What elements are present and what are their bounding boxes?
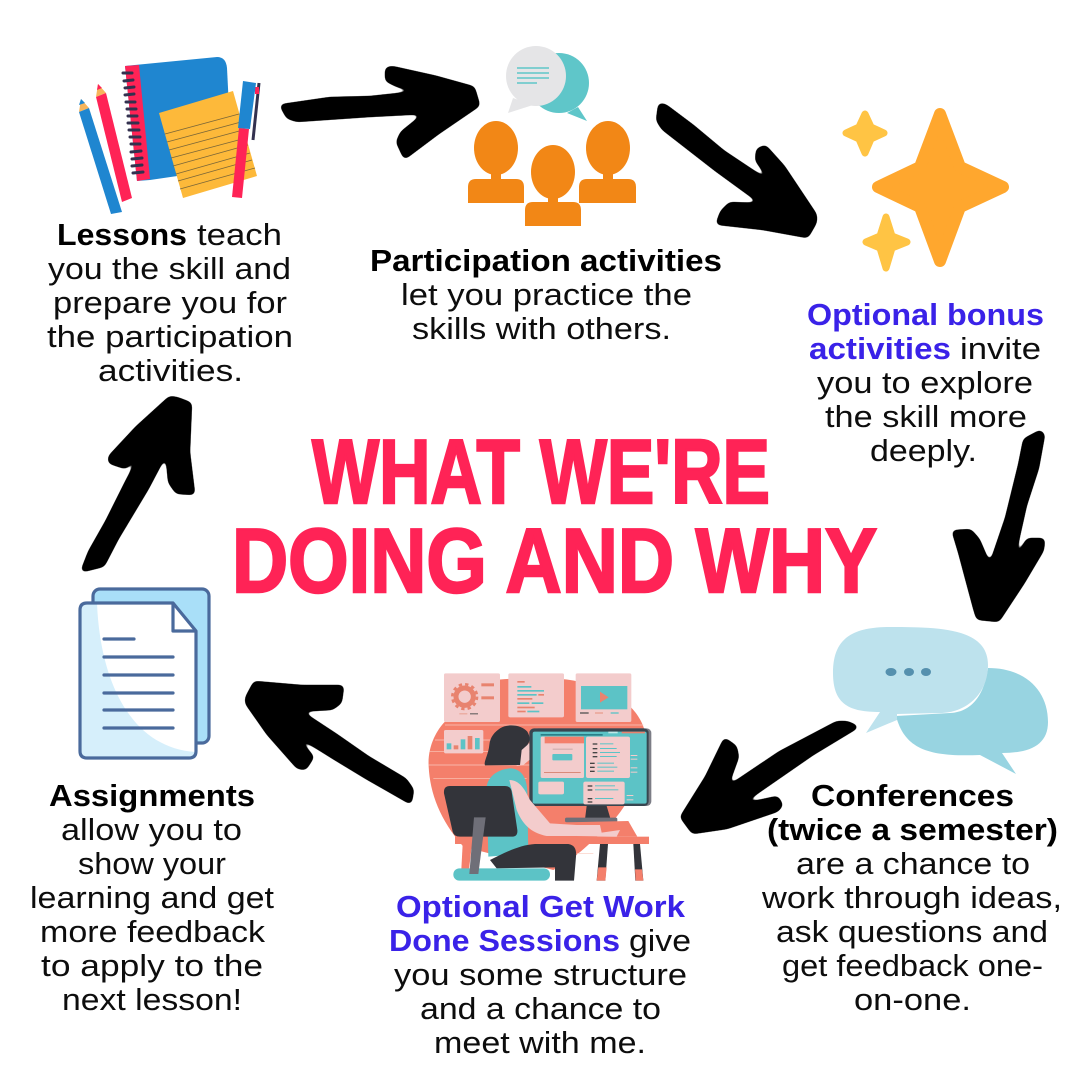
text: optional get work done sessions: and a chance to <box>420 991 661 1026</box>
arrow: assignments to lessons <box>83 398 193 570</box>
text: lessons: teach <box>197 217 282 252</box>
text: optional bonus activities: the skill more <box>825 399 1027 434</box>
text: optional bonus activities <box>807 297 1044 468</box>
title <box>232 422 877 612</box>
text: assignments: allow you to <box>61 812 242 847</box>
text: assignments: show your <box>78 846 226 881</box>
text: optional bonus activities: deeply. <box>870 433 977 468</box>
text: optional bonus activities: you to explore <box>817 365 1033 400</box>
icon: group of people with speech bubbles <box>468 46 636 226</box>
icon: conference speech bubbles <box>833 627 1048 774</box>
text: optional get work done sessions <box>389 889 691 1060</box>
text: lessons: Lessons <box>57 217 187 252</box>
title: DOING AND WHY <box>232 511 877 612</box>
text: optional bonus activities: Optional bonus <box>807 297 1044 332</box>
icon: sparkle stars <box>846 114 1003 268</box>
text: lessons <box>47 217 293 388</box>
text: optional get work done sessions: give <box>629 923 691 958</box>
text: conferences: are a chance to <box>796 846 1030 881</box>
title: WHAT WE'RE <box>312 422 770 523</box>
text: participation activities: Participation activities <box>370 243 722 278</box>
text: assignments: Assignments <box>49 778 255 813</box>
text: optional get work done sessions: you some structure <box>394 957 687 992</box>
arrow: conferences to work sessions <box>682 723 856 832</box>
arrow: bonus to conferences <box>954 432 1043 620</box>
text: optional bonus activities: invite <box>960 331 1041 366</box>
text: assignments: learning and get <box>30 880 274 915</box>
text: participation activities: let you practice the <box>401 277 692 312</box>
icon: documents <box>80 589 209 758</box>
text: conferences: work through ideas, <box>761 880 1062 915</box>
arrow: lessons to participation <box>282 68 478 157</box>
text: conferences: on-one. <box>854 982 971 1017</box>
arrow: participation to bonus <box>658 105 815 236</box>
text: optional get work done sessions: Done Sessions <box>389 923 620 958</box>
text: optional bonus activities: activities <box>809 331 951 366</box>
text: conferences: get feedback one- <box>782 948 1043 983</box>
text: assignments: next lesson! <box>62 982 242 1017</box>
text: assignments <box>30 778 274 1017</box>
text: conferences: (twice a semester) <box>767 812 1058 847</box>
text: lessons: activities. <box>98 353 243 388</box>
text: conferences: ask questions and <box>776 914 1048 949</box>
arrow: work sessions to assignments <box>247 683 412 802</box>
text: assignments: more feedback <box>40 914 266 949</box>
text: participation activities <box>370 243 722 346</box>
text: optional get work done sessions: meet with me. <box>434 1025 646 1060</box>
text: conferences: Conferences <box>811 778 1014 813</box>
text: conferences <box>761 778 1062 1017</box>
text: participation activities: skills with others. <box>412 311 671 346</box>
icon: woman working at computer <box>429 673 651 881</box>
text: lessons: prepare you for <box>53 285 287 320</box>
text: optional get work done sessions: Optional Get Work <box>396 889 686 924</box>
text: assignments: to apply to the <box>41 948 263 983</box>
icon: notebook and pencils <box>79 57 259 214</box>
text: lessons: the participation <box>47 319 293 354</box>
text: lessons: you the skill and <box>48 251 291 286</box>
